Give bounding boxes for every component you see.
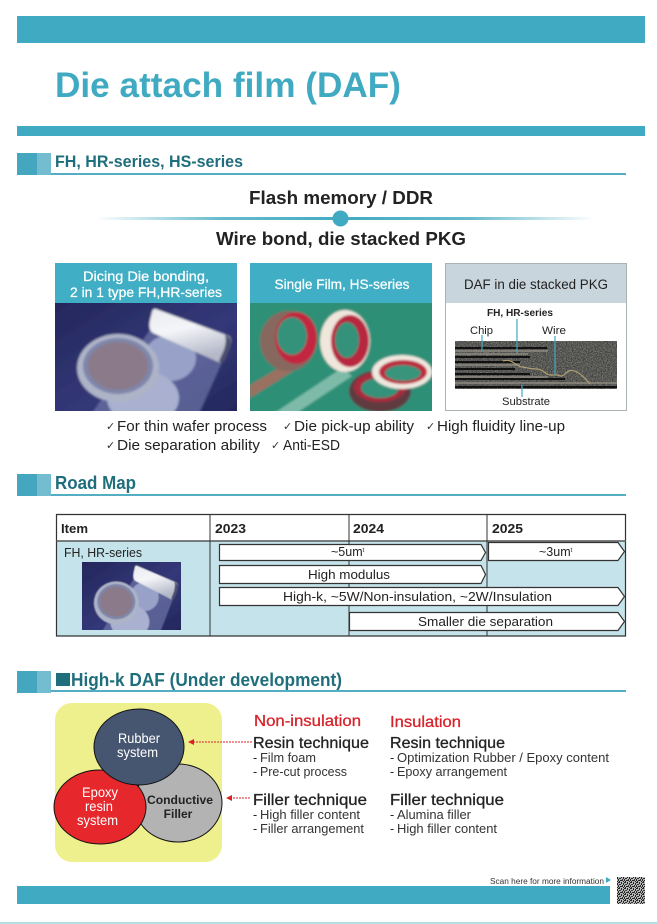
- circle: rubber system: system: [117, 744, 158, 760]
- bar: High-k: High-k, ~5W/Non-insulation, ~2W/Insulation: [283, 590, 552, 604]
- feature checklist: Die pick-up ability: [294, 419, 415, 435]
- circle: epoxy resin system: [54, 770, 146, 844]
- roadmap table: [56, 514, 626, 639]
- section heading: Road Map: [17, 473, 626, 496]
- bar: ~5um thickness: ~5um: [331, 545, 363, 559]
- section heading: FH, HR-series, HS-series: [17, 152, 626, 175]
- application: Wire bond, die stacked PKG: Wire bond, die stacked PKG: [216, 229, 466, 249]
- text block: non-insulation: -: [253, 808, 257, 822]
- feature checklist: ✓: [426, 420, 435, 433]
- panel: DAF in die stacked PKG: DAF in die stacked PKG: [464, 277, 608, 292]
- section heading: Road Map: Road Map: [55, 473, 136, 493]
- text block: non-insulation: Filler technique: [253, 792, 367, 809]
- panel: single film card: Single Film, HS-series: [274, 276, 410, 292]
- panel: dicing die bonding card: 2 in 1 type FH,HR-series: [70, 285, 222, 300]
- text block: non-insulation: Non-insulation: [254, 713, 361, 730]
- bar: High-k: [220, 588, 624, 606]
- bar: ~3um thickness: [488, 542, 624, 560]
- roadmap table: 2023: [215, 521, 246, 536]
- diagram: three material systems: [54, 703, 222, 862]
- text block: insulation: -: [390, 751, 394, 765]
- roadmap table: 2025: [492, 521, 523, 536]
- feature checklist: ✓: [271, 439, 280, 452]
- text block: insulation: Alumina filler: [397, 808, 471, 822]
- feature checklist: Die separation ability: [117, 438, 261, 454]
- divider with dot: [95, 210, 595, 226]
- bottom banner: [17, 886, 610, 904]
- top banner: [17, 16, 645, 43]
- bar: ~5um thickness: [220, 544, 486, 560]
- circle: conductive filler: Conductive: [147, 793, 213, 807]
- text block: non-insulation: Filler arrangement: [260, 822, 365, 836]
- text block: insulation: Resin technique: [390, 735, 505, 752]
- panel: DAF in die stacked PKG: Substrate: [502, 396, 550, 408]
- text block: insulation: [390, 714, 610, 836]
- title: Die attach film (DAF): [55, 66, 401, 105]
- text block: insulation: Insulation: [390, 714, 461, 731]
- bar: ~5um thickness: t: [363, 548, 365, 554]
- panel: dicing die bonding card: Dicing Die bonding,: [83, 269, 209, 284]
- circle: epoxy resin system: Epoxy: [82, 784, 118, 800]
- bar: Smaller die separation: Smaller die separation: [418, 615, 553, 629]
- panel: DAF in die stacked PKG: FH, HR-series: [487, 308, 553, 319]
- section heading: FH, HR-series, HS-series: FH, HR-series, HS-series: [55, 152, 243, 171]
- text block: non-insulation: Pre-cut process: [260, 765, 347, 779]
- feature checklist: ✓: [283, 420, 292, 433]
- text block: non-insulation: High filler content: [260, 808, 361, 822]
- bar: ~3um thickness: t: [571, 548, 573, 554]
- application: Flash memory / DDR: Flash memory / DDR: [249, 188, 433, 208]
- feature checklist: For thin wafer process: [117, 419, 267, 435]
- feature checklist: High fluidity line-up: [437, 419, 565, 435]
- feature checklist: [106, 419, 565, 454]
- roadmap table: Item: [61, 521, 88, 536]
- text block: non-insulation: -: [253, 751, 257, 765]
- feature checklist: ✓: [106, 420, 115, 433]
- text block: non-insulation: -: [253, 765, 257, 779]
- text block: non-insulation: Resin technique: [253, 735, 369, 752]
- circle: conductive filler: [134, 764, 222, 842]
- roadmap table: FH, HR-series: [64, 545, 142, 560]
- panel: DAF in die stacked PKG: Wire: [542, 325, 566, 337]
- bar: High modulus: High modulus: [308, 568, 390, 582]
- circle: epoxy resin system: system: [77, 812, 118, 828]
- panel: DAF in die stacked PKG: [446, 264, 626, 410]
- circle: rubber system: [94, 709, 184, 785]
- arrow: filler technique to conductive filler: [226, 795, 250, 801]
- icon: QR code: [617, 877, 645, 904]
- bar: Smaller die separation: [350, 612, 624, 630]
- title rule: [17, 126, 645, 136]
- bar: ~3um thickness: ~3um: [539, 545, 571, 559]
- text block: insulation: Epoxy arrangement: [397, 765, 508, 779]
- circle: rubber system: Rubber: [118, 730, 160, 746]
- text block: insulation: High filler content: [397, 822, 498, 836]
- text block: non-insulation: -: [253, 822, 257, 836]
- feature checklist: Anti-ESD: [283, 438, 340, 454]
- bar: High modulus: [220, 566, 486, 584]
- section heading: High-k DAF: High-k DAF (Under development): [71, 670, 342, 690]
- text block: insulation: Filler technique: [390, 792, 504, 809]
- circle: epoxy resin system: resin: [85, 798, 113, 814]
- arrow: resin technique to rubber: [188, 739, 252, 745]
- text block: insulation: -: [390, 765, 394, 779]
- circle: conductive filler: Filler: [164, 807, 193, 821]
- panel: single film card: [245, 263, 437, 416]
- roadmap table: 2024: [353, 521, 385, 536]
- section heading: High-k DAF: [17, 670, 626, 693]
- panel: DAF in die stacked PKG: Chip: [470, 325, 493, 337]
- scan prompt: Scan here for more information: [490, 877, 604, 886]
- text block: insulation: Optimization Rubber / Epoxy content: [397, 751, 610, 765]
- text block: non-insulation: Film foam: [260, 751, 316, 765]
- text block: insulation: -: [390, 822, 394, 836]
- panel: dicing die bonding card: [50, 263, 242, 425]
- text block: non-insulation: [253, 713, 369, 836]
- text block: insulation: -: [390, 808, 394, 822]
- feature checklist: ✓: [106, 439, 115, 452]
